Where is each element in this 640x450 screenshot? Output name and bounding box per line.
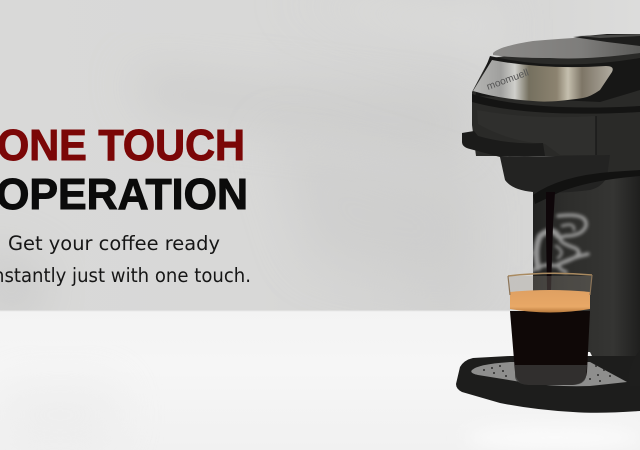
brew basket	[500, 155, 610, 193]
drip tray	[456, 350, 640, 413]
head unit	[472, 40, 640, 172]
coffee stream	[546, 192, 555, 290]
subheading text	[0, 232, 251, 287]
coffee machine	[456, 34, 640, 413]
steel front band	[473, 60, 613, 102]
heading: one touch: ONE TOUCH	[0, 122, 245, 170]
wall background	[0, 0, 640, 320]
table surface	[0, 310, 640, 450]
machine column	[533, 170, 640, 372]
subheading text: Get your coffee ready	[8, 232, 220, 255]
lid	[493, 34, 640, 58]
glass of coffee	[508, 273, 592, 385]
column shoulder	[533, 170, 640, 204]
brand name: moomuell	[485, 67, 530, 93]
heading: operation: OPERATION	[0, 171, 248, 219]
pod handle	[462, 131, 545, 157]
steam	[512, 215, 588, 272]
